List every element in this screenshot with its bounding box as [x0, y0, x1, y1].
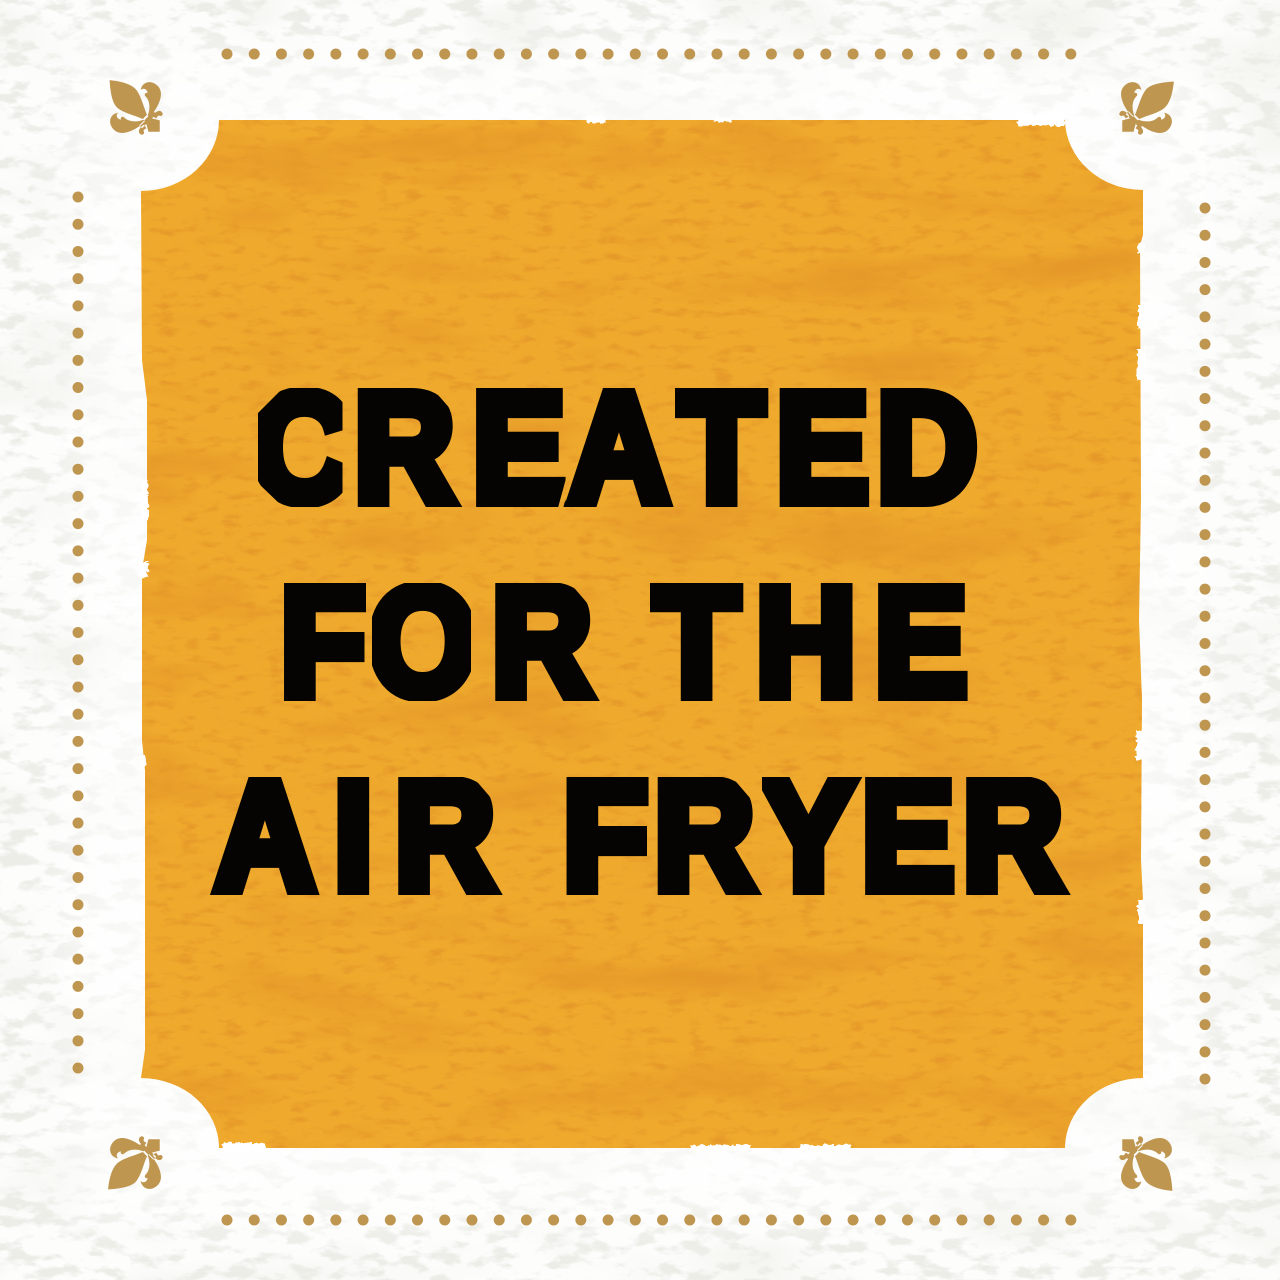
title: [215, 362, 1063, 922]
panel: distressed orange ticket: [130, 110, 1155, 1160]
panel worn edge flecks: [139, 114, 1145, 1151]
title line: AIR FRYER: AIR FRYER: [215, 750, 1063, 922]
icon: fleur-de-lis top right: [1100, 59, 1195, 154]
icon: fleur-de-lis bottom right: [1100, 1117, 1195, 1212]
icon: fleur-de-lis bottom left: [87, 1117, 182, 1212]
title line: CREATED: CREATED: [251, 362, 977, 534]
icon: fleur-de-lis top left: [87, 59, 182, 154]
title line: FOR THE: FOR THE: [281, 556, 967, 728]
